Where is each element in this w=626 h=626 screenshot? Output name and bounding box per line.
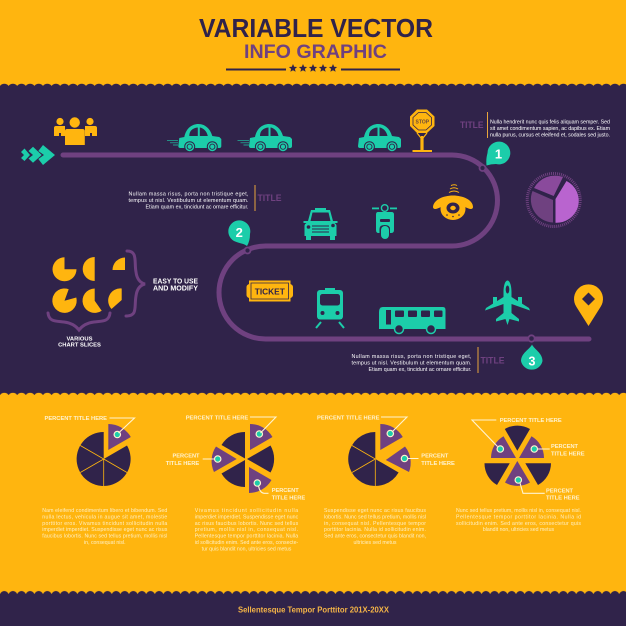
icon: train bbox=[316, 288, 344, 328]
pie chart 4: PERCENT bbox=[551, 444, 578, 450]
pie chart 2 text: tur quis blandit non, ultricies sed metus bbox=[202, 546, 292, 552]
pie chart 4 text: Pellentesque tempor porttitor lacinia. Nulla id bbox=[456, 514, 581, 520]
pie chart 3 text: lobortis. Nunc sed tellus pretium, mollis nisl bbox=[324, 514, 426, 520]
callout: title 2: Nullam massa risus, porta non tristique eget, bbox=[128, 192, 248, 198]
bottom brace bbox=[48, 313, 110, 330]
callout: title 3: tempus ut nisl. Vestibulum ut elementum quam. bbox=[352, 360, 472, 366]
pie chart 4 text bbox=[456, 508, 581, 533]
pie chart 4: PERCENT bbox=[546, 488, 573, 494]
pie chart 2 bbox=[166, 416, 305, 502]
pie chart 2: PERCENT bbox=[272, 488, 299, 494]
pie chart 2 text: ac risus faucibus lobortis. Nunc sed tellus bbox=[195, 521, 299, 527]
marker 1 bbox=[486, 142, 510, 166]
pie chart 3 text: Suspendisse eget nunc ac risus faucibus bbox=[324, 508, 426, 514]
callout: title 1: TITLE bbox=[460, 120, 484, 131]
callout: title 1: sit amet condimentum sapien, ac dapibus ex. Etiam bbox=[490, 126, 611, 132]
label: easy to use: EASY TO USE bbox=[153, 278, 198, 286]
pie chart 1 text: Nam eleifend condimentum libero et bibendum. Sed bbox=[42, 508, 167, 514]
pie chart 1 text: porttitor eros. Vivamus tincidunt sollicitudin nulla bbox=[42, 521, 167, 527]
label: various chart slices: CHART SLICES bbox=[58, 342, 101, 348]
pie chart 3 text: ultricies sed metus bbox=[354, 540, 397, 546]
icon: start chevrons bbox=[21, 145, 55, 165]
marker 3: 3 bbox=[529, 354, 536, 368]
pie chart 2 text bbox=[195, 508, 299, 552]
pie chart 4 text: Nunc sed tellus pretium, mollis nisl in, consequat nisl. bbox=[456, 508, 581, 514]
icon: location pin bbox=[574, 284, 603, 326]
pie chart 1 text: faucibus lobortis. Nunc sed tellus pretium, mollis nisl bbox=[42, 534, 167, 540]
pie chart 2 text: pretium, mollis nisl in, consequat nisl. bbox=[195, 527, 298, 533]
pie chart 3 text: Sed ante eros, consectetur quis blandit non, bbox=[324, 534, 426, 540]
pie chart 4 text: blandit non, ultricies sed metus bbox=[483, 527, 555, 533]
marker 3 bbox=[521, 344, 542, 370]
pie chart 4 bbox=[472, 418, 585, 502]
callout: title 3: Nullam massa risus, porta non tristique eget, bbox=[352, 354, 472, 360]
panel: footer bbox=[0, 594, 626, 626]
icon: car 1 bbox=[167, 124, 221, 152]
label: various chart slices: VARIOUS bbox=[67, 336, 93, 342]
pie chart 3: TITLE HERE bbox=[421, 461, 455, 467]
pie chart 4 text: sollicitudin enim. Sed ante eros, consectetur quis bbox=[456, 521, 581, 527]
icon: car 3 bbox=[358, 124, 401, 152]
pie chart 2 text: imperdiet imperdiet. Suspendisse eget nunc bbox=[195, 514, 299, 520]
panel: header bbox=[0, 0, 626, 86]
pie chart 1 bbox=[44, 416, 134, 486]
pie chart 3: PERCENT TITLE HERE bbox=[317, 416, 380, 422]
callout: title 2: TITLE bbox=[258, 193, 282, 204]
pie chart 2: TITLE HERE bbox=[166, 461, 199, 467]
marker 2 bbox=[228, 220, 250, 246]
label: easy to use bbox=[153, 278, 198, 292]
chart slices grid bbox=[52, 257, 125, 313]
chart: purple pie bbox=[527, 174, 580, 226]
title ornament: rules and stars bbox=[226, 64, 400, 72]
pie chart 3 bbox=[317, 416, 455, 486]
callout: title 2: tempus ut nisl. Vestibulum ut elementum quam. bbox=[128, 198, 248, 204]
callout: title 3: TITLE bbox=[480, 356, 505, 366]
callout: title 1: Nulla hendrerit nunc quis felis aliquam semper. Sed bbox=[490, 120, 610, 126]
marker 2: 2 bbox=[236, 225, 243, 240]
footer text: Sellentesque Tempor Porttitor 201X-20XX bbox=[238, 604, 389, 614]
track stops bbox=[244, 165, 535, 342]
callout: title 2 bbox=[128, 185, 282, 211]
pie chart 3 text: in, consequat nisl. Pellentesque tempor bbox=[324, 521, 426, 527]
icon: ticket bbox=[246, 280, 293, 302]
icon: stop sign: STOP bbox=[416, 119, 430, 125]
label: various chart slices bbox=[58, 336, 101, 348]
callout: title 2: Etiam quam ex, tincidunt ac ornare efficitur. bbox=[146, 204, 248, 210]
pie chart 1 text: nulla lectus, vehicula in augue sit amet, molestie bbox=[42, 514, 167, 520]
route track bbox=[63, 155, 589, 339]
icon: telephone bbox=[433, 185, 473, 220]
icon: taxi bbox=[304, 208, 338, 240]
title: VARIABLE VECTOR bbox=[199, 15, 433, 43]
label: easy to use: AND MODIFY bbox=[153, 286, 198, 292]
pie chart 2: TITLE HERE bbox=[272, 496, 305, 502]
right brace bbox=[126, 251, 145, 316]
pie chart 3: PERCENT bbox=[421, 454, 449, 460]
panel: pie chart section bbox=[0, 395, 626, 595]
pie chart 4: PERCENT TITLE HERE bbox=[500, 418, 562, 424]
pie chart 4: TITLE HERE bbox=[546, 496, 580, 502]
icon: airplane bbox=[485, 280, 530, 325]
pie chart 4: TITLE HERE bbox=[551, 451, 585, 457]
callout: title 1 bbox=[460, 112, 611, 138]
pie chart 1 text: in, consequat nisl. bbox=[84, 540, 126, 546]
pie chart 2: PERCENT TITLE HERE bbox=[186, 416, 248, 422]
pie chart 3 text: porttitor lacinia. Nulla id sollicitudin enim. bbox=[324, 527, 426, 533]
pie chart 1 text bbox=[42, 508, 168, 546]
icon: bus bbox=[379, 307, 446, 334]
pie chart 3 text bbox=[324, 508, 426, 546]
marker 1: 1 bbox=[495, 146, 502, 162]
icon: stop sign bbox=[410, 110, 434, 152]
pie chart 1 text: imperdiet imperdiet. Suspendisse eget nunc ac risus bbox=[42, 527, 168, 533]
pie chart 2 text: Pellentesque tempor porttitor lacinia. Nulla bbox=[195, 534, 298, 540]
pie chart 2: PERCENT bbox=[172, 454, 200, 460]
pie chart 1: PERCENT TITLE HERE bbox=[44, 416, 107, 422]
panel: dark route section bbox=[0, 86, 626, 395]
pie chart 2 text: id sollicitudin enim. Sed ante eros, consecte- bbox=[195, 540, 298, 546]
callout: title 3: Etiam quam ex, tincidunt ac ornare efficitur. bbox=[368, 367, 472, 373]
icon: car 2 bbox=[238, 124, 292, 152]
icon: ticket: TICKET bbox=[255, 286, 285, 296]
icon: people bbox=[54, 117, 97, 145]
icon: scooter bbox=[372, 205, 397, 239]
callout: title 1: nulla purus, cursus et eleifend et, sodales sed justo. bbox=[490, 132, 610, 138]
callout: title 3 bbox=[352, 347, 505, 373]
subtitle: INFO GRAPHIC bbox=[244, 42, 387, 63]
pie chart 2 text: Vivamus tincidunt sollicitudin nulla bbox=[195, 508, 298, 514]
